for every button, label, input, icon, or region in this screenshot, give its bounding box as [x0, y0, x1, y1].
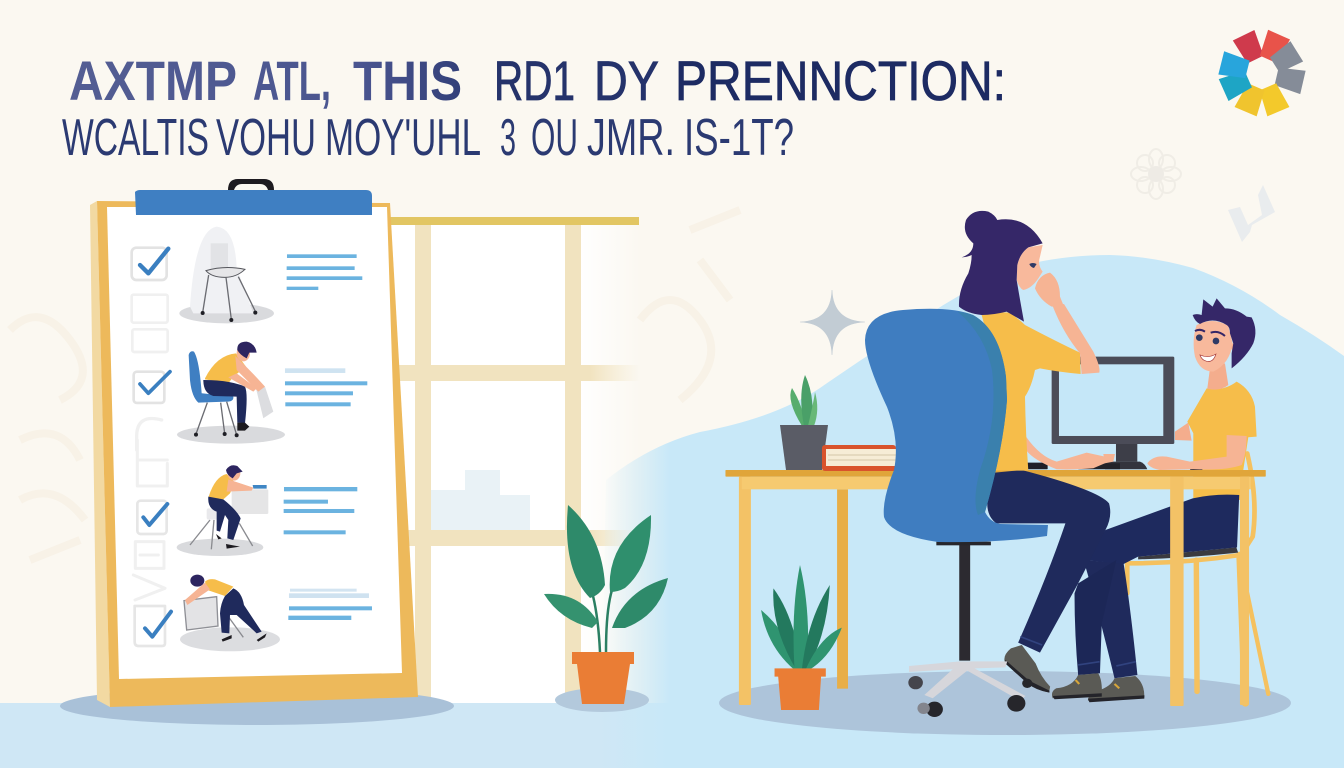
- boy figure: [1084, 298, 1257, 678]
- woman shoes: [1004, 645, 1144, 702]
- row 1 empty chair: [179, 227, 274, 323]
- woman eye: [1029, 263, 1037, 268]
- faint block icon: [1228, 185, 1275, 242]
- title line 2: 3: [500, 109, 516, 167]
- title line 2: [62, 109, 794, 167]
- boy arm behind: [1175, 423, 1192, 441]
- title line 1: ATL,: [253, 49, 331, 112]
- row 3 checkbox: [135, 440, 167, 568]
- cuff details: [1020, 637, 1136, 666]
- woman arm on keyboard: [1026, 437, 1105, 469]
- window: [390, 217, 640, 705]
- row 4 text lines: [288, 589, 372, 620]
- checklist lower rows: [133, 440, 372, 651]
- boy seat cushion: [1138, 547, 1238, 559]
- woman far leg: [1075, 560, 1116, 675]
- chair shell: [865, 309, 1048, 542]
- row 1 text lines: [287, 254, 362, 290]
- title line 1: DY: [594, 49, 659, 112]
- monitor and keyboard: [1025, 357, 1247, 470]
- woman shirt: [982, 312, 1081, 471]
- woman face: [1017, 245, 1043, 290]
- row 4 checkbox: [133, 575, 171, 646]
- faint flower icon: [1131, 149, 1181, 199]
- desk top, apron and legs: [725, 470, 1266, 706]
- chair base: [908, 542, 1032, 717]
- title line 1: THIS: [353, 49, 462, 112]
- title line 2: VOHU: [216, 109, 316, 167]
- woman figure: [959, 211, 1144, 702]
- boy's hands: [1147, 435, 1247, 470]
- boy thigh: [1084, 495, 1239, 564]
- faint background scribbles: [10, 210, 740, 560]
- woman near leg: [987, 470, 1110, 653]
- title line 1: RD1: [494, 49, 575, 112]
- desk plant with grey pot: [780, 375, 828, 470]
- boy hair: [1193, 298, 1255, 368]
- row 1 checkbox: [132, 248, 168, 352]
- woman hair: [959, 211, 1043, 322]
- boy neck: [1207, 363, 1228, 390]
- title line 1: PRENNCTION:: [675, 49, 1006, 112]
- title line 2: IS-1T?: [684, 109, 794, 167]
- pale blue backdrop shape: [600, 255, 1344, 768]
- row 2 checkbox: [134, 372, 170, 450]
- title line 1: [69, 49, 1006, 112]
- boy's chair: [1127, 453, 1268, 703]
- row 2 text lines: [285, 368, 367, 406]
- boy eyes and smile: [1195, 330, 1225, 361]
- row 2 seated person: [177, 342, 285, 444]
- boy shirt: [1187, 382, 1257, 500]
- sparkle: [800, 290, 865, 355]
- floor strip: [0, 703, 1344, 768]
- checklist upper rows: [132, 227, 367, 450]
- clipboard: [90, 179, 418, 707]
- chair shell edge: [958, 312, 1007, 515]
- office chair: [865, 309, 1048, 717]
- window plant: [544, 505, 668, 712]
- small floor plant: [761, 565, 842, 710]
- stacked books: [822, 445, 896, 471]
- title line 2: OU: [531, 109, 578, 167]
- title line 2: JMR.: [587, 109, 675, 167]
- row 3 person lifting: [177, 465, 268, 556]
- woman forearm: [1053, 304, 1100, 374]
- woman hand: [1035, 273, 1064, 307]
- title line 2: WCALTIS: [62, 109, 209, 167]
- title line 2: MOY'UHL: [325, 109, 481, 167]
- clipboard shadow: [60, 687, 454, 725]
- boy shin: [1084, 560, 1137, 678]
- row 3 text lines: [284, 487, 357, 534]
- floor ellipse under desk: [719, 671, 1291, 735]
- row 4 person pushing box: [180, 575, 280, 651]
- title line 1: AXTMP: [69, 49, 237, 112]
- boy face: [1194, 321, 1233, 372]
- logo: colour wheel: [1218, 30, 1306, 116]
